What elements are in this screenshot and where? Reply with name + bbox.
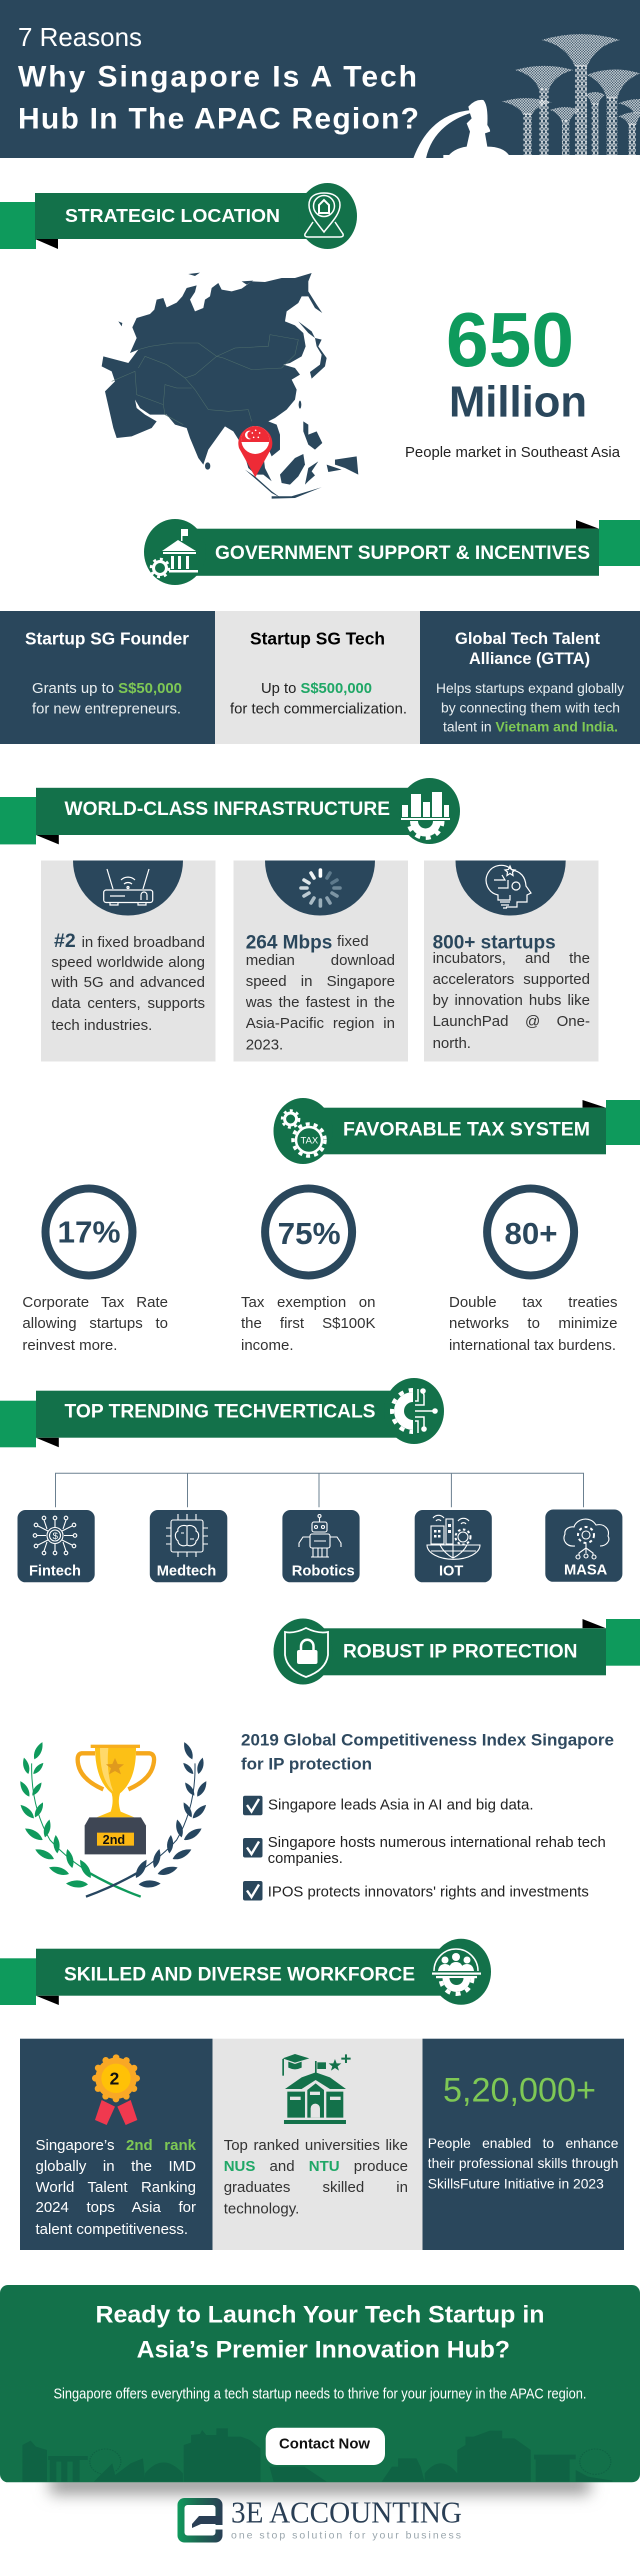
- icon: smart city globe: [427, 1515, 480, 1559]
- icon: robot: [299, 1514, 341, 1557]
- icon: bulb and head: [456, 860, 566, 916]
- tile: MASA: MASA: [564, 1562, 607, 1579]
- panel: SkillsFuture: [422, 2039, 624, 2250]
- heading text: STRATEGIC LOCATION: [65, 205, 280, 226]
- icon: university with graduation cap: [282, 2054, 351, 2124]
- text: talent ranking: globally in the IMD: [36, 2158, 196, 2174]
- checklist item 2: [243, 1834, 606, 1867]
- icon: brain chip: [166, 1514, 208, 1557]
- panel: global tech talent alliance: Helps startups expand globally: [436, 680, 624, 696]
- heading text: GOVERNMENT SUPPORT & INCENTIVES: [215, 543, 590, 564]
- heading text: TOP TRENDING TECHVERTICALS: [64, 1401, 376, 1423]
- text: 264 Mbps: Asia-Pacific region in: [246, 1015, 395, 1032]
- stat: 17 percent corporate tax: 17%: [58, 1215, 120, 1250]
- skyline silhouette: [22, 2428, 612, 2482]
- text: 264 Mbps: [246, 932, 395, 1054]
- text: talent ranking: [36, 2136, 196, 2238]
- country borders: [112, 335, 298, 425]
- mainland Asia: [102, 273, 322, 481]
- section heading: government support: [144, 519, 640, 585]
- stat: 80 plus treaties: [449, 1188, 618, 1354]
- text: number 2 in broadband: with 5G and advanced: [51, 974, 205, 991]
- text: 264 Mbps: speed in Singapore: [246, 973, 395, 990]
- text: universities: NUS and NTU produce: [224, 2158, 408, 2174]
- section heading: strategic location: [0, 183, 357, 249]
- stat: 17 percent corporate tax: allowing startups to: [22, 1315, 168, 1332]
- tagline: one stop solution for your business: [231, 2529, 461, 2541]
- text: talent ranking: World Talent Ranking: [36, 2178, 196, 2196]
- heading: for IP protection: [241, 1754, 372, 1773]
- panel: startup SG tech: [215, 611, 420, 744]
- text: talent ranking: talent competitiveness.: [36, 2221, 188, 2238]
- text: number 2 in broadband: [51, 930, 205, 1034]
- icon: Singapore flag pin: [238, 426, 272, 477]
- text: 800+ startups: accelerators supported: [433, 971, 590, 988]
- text: number 2 in broadband: data centers, supports: [51, 995, 205, 1012]
- panel: startup SG tech: Startup SG Tech: [250, 629, 385, 649]
- text block: IP protection index: [241, 1731, 614, 1900]
- stat: 80 plus treaties: 80+: [504, 1216, 558, 1251]
- contact button: [266, 2428, 385, 2465]
- panel: global tech talent alliance: Global Tech Talent: [455, 629, 600, 648]
- panel: startup SG founder: [0, 611, 215, 744]
- stat: 75 percent tax exemption: 75%: [278, 1216, 341, 1251]
- text: number 2 in broadband: #2: [54, 930, 76, 952]
- checklist item 2: companies.: [268, 1850, 343, 1867]
- checklist item 2: Singapore hosts numerous international rehab tech: [268, 1834, 606, 1851]
- text: 264 Mbps: 264 Mbps: [246, 932, 332, 954]
- panel: startup SG tech: for tech commercialization.: [230, 700, 407, 718]
- stat: 650 million: Million: [449, 378, 587, 427]
- icon: government building with gear: [151, 529, 198, 577]
- text: number 2 in broadband: in fixed broadband: [82, 934, 205, 951]
- panel: card broadband: [41, 860, 216, 1062]
- tile: IOT: [415, 1510, 492, 1582]
- panel: global tech talent alliance: [420, 611, 640, 744]
- CTA heading: Asia’s Premier Innovation Hub?: [137, 2336, 510, 2363]
- icon: loading spinner: [265, 860, 375, 916]
- heading text: SKILLED AND DIVERSE WORKFORCE: [64, 1965, 415, 1986]
- icon: medal: [95, 2058, 137, 2125]
- stat: 17 percent corporate tax: [22, 1188, 168, 1354]
- tile: Fintech: [18, 1510, 95, 1582]
- stat: 650 million: 650: [446, 298, 574, 384]
- map of Asia with Singapore pin: [102, 273, 358, 499]
- text: number 2 in broadband: tech industries.: [51, 1017, 152, 1034]
- stat: 75 percent tax exemption: Tax exemption on: [241, 1294, 376, 1311]
- connector tree: [56, 1473, 584, 1507]
- stat: 75 percent tax exemption: [241, 1188, 376, 1354]
- panel: talent ranking: [20, 2039, 212, 2250]
- CTA heading: [96, 2301, 544, 2363]
- text: universities: graduates skilled in: [224, 2178, 408, 2196]
- header banner: [0, 0, 640, 159]
- text: number 2 in broadband: speed worldwide along: [51, 954, 205, 970]
- icon: navy laurel branch: [86, 1741, 209, 1897]
- panel: startup SG founder: for new entrepreneurs.: [32, 700, 181, 718]
- panel: global tech talent alliance: Alliance (GTTA): [469, 649, 590, 668]
- tile: Robotics: [282, 1510, 360, 1582]
- stat: 17 percent corporate tax: reinvest more.: [22, 1337, 117, 1354]
- tile: Robotics: Robotics: [292, 1563, 355, 1580]
- text: 800+ startups: LaunchPad @ One-: [433, 1013, 590, 1030]
- text: 264 Mbps: was the fastest in the: [246, 994, 395, 1011]
- contact button: Contact Now: [279, 2436, 370, 2453]
- header text: 7 Reasons: 7 Reasons: [18, 22, 142, 52]
- icon: cloud gear: [564, 1519, 609, 1559]
- text: 800+ startups: north.: [433, 1035, 471, 1052]
- checklist item 3: IPOS protects innovators' rights and investments: [268, 1883, 589, 1900]
- stat: 80 plus treaties: Double tax treaties: [449, 1294, 618, 1311]
- text: 264 Mbps: median download: [246, 952, 395, 969]
- icon: supertrees and merlion skyline: [413, 34, 640, 159]
- stat: 650 million: [405, 298, 621, 461]
- icon: team and gear: [432, 1949, 481, 1994]
- text: talent ranking: 2024 tops Asia for: [36, 2199, 196, 2216]
- section heading: robust IP protection: [274, 1618, 640, 1684]
- call to action panel: [0, 2285, 640, 2494]
- section heading: skilled and diverse workforce: [0, 1939, 491, 2005]
- CTA heading: Ready to Launch Your Tech Startup in: [96, 2301, 544, 2328]
- icon: gold trophy: [78, 1745, 154, 1854]
- text: 800+ startups: by innovation hubs like: [433, 992, 590, 1009]
- heading text: FAVORABLE TAX SYSTEM: [343, 1120, 590, 1141]
- logo: 3E Accounting: [178, 2495, 462, 2542]
- icon: router: [73, 860, 183, 916]
- icon: city and gear: [401, 792, 450, 838]
- icon: coin circuit: $: [53, 1531, 59, 1542]
- text: SkillsFuture: SkillsFuture Initiative in 2023: [428, 2175, 604, 2191]
- icon: tax gears: TAX: [300, 1136, 319, 1146]
- tile: MASA: [545, 1510, 622, 1582]
- title: [18, 61, 419, 136]
- icon: gold trophy: 2nd: [103, 1833, 125, 1847]
- panel: universities: [212, 2039, 422, 2250]
- title: Why Singapore Is A Tech: [18, 61, 417, 94]
- heading text: ROBUST IP PROTECTION: [343, 1641, 578, 1662]
- icon: medal: 2: [110, 2068, 119, 2088]
- icon: green laurel branch: [18, 1741, 141, 1897]
- panel: startup SG founder: Startup SG Founder: [25, 629, 189, 649]
- text: 800+ startups: incubators, and the: [433, 950, 590, 967]
- checklist item 1: Singapore leads Asia in AI and big data.: [268, 1796, 534, 1813]
- tile: Medtech: Medtech: [157, 1563, 216, 1580]
- panel: startup SG tech: Up to S$500,000: [261, 680, 372, 697]
- panel: startup SG founder: Grants up to S$50,000: [32, 680, 182, 697]
- text: talent ranking: Singapore’s 2nd rank: [36, 2136, 196, 2154]
- icon: trophy with laurel wreath: [18, 1741, 209, 1897]
- icon: logo mark: [178, 2498, 223, 2542]
- panel: card download speed: [234, 860, 408, 1062]
- text: 264 Mbps: 2023.: [246, 1037, 283, 1054]
- wordmark: 3E ACCOUNTING: [231, 2495, 462, 2530]
- heading: [241, 1731, 614, 1773]
- text: 800+ startups: 800+ startups: [433, 932, 556, 954]
- section heading: favorable tax system: [274, 1098, 640, 1164]
- stat: 75 percent tax exemption: the first S$100K: [241, 1315, 376, 1332]
- panel: global tech talent alliance: by connecting them with tech: [441, 699, 620, 715]
- icon: location pin: [305, 193, 343, 237]
- section heading: top trending techverticals: [0, 1378, 444, 1447]
- icon: shield with lock: [285, 1628, 328, 1677]
- stat: 75 percent tax exemption: income.: [241, 1337, 294, 1354]
- tile: Medtech: [150, 1510, 227, 1582]
- stat: 5,20,000+: 5,20,000+: [443, 2072, 596, 2110]
- heading text: WORLD-CLASS INFRASTRUCTURE: [64, 799, 390, 820]
- stat: 650 million: People market in Southeast Asia: [405, 444, 621, 461]
- tile: IOT: IOT: [439, 1563, 463, 1580]
- section heading: world-class infrastructure: [0, 778, 460, 844]
- tile: Fintech: Fintech: [29, 1563, 81, 1580]
- text: 264 Mbps: fixed: [337, 933, 369, 950]
- icon: gear circuit: [392, 1388, 438, 1433]
- panel: card startups: [424, 860, 598, 1062]
- text: SkillsFuture: their professional skills through: [428, 2156, 618, 2171]
- heading: 2019 Global Competitiveness Index Singapore: [241, 1731, 614, 1750]
- stat: 80 plus treaties: networks to minimize: [449, 1315, 618, 1332]
- islands: [118, 273, 358, 499]
- title: Hub In The APAC Region?: [18, 103, 419, 136]
- panel: global tech talent alliance: talent in Vietnam and India.: [443, 718, 618, 734]
- text: SkillsFuture: People enabled to enhance: [428, 2136, 618, 2151]
- icon: tax gears: [282, 1110, 325, 1156]
- text: universities: [224, 2136, 408, 2217]
- stat: 80 plus treaties: international tax burdens.: [449, 1337, 616, 1354]
- text: universities: technology.: [224, 2200, 299, 2217]
- stat: 17 percent corporate tax: Corporate Tax Rate: [22, 1294, 168, 1311]
- text: universities: Top ranked universities like: [224, 2136, 408, 2154]
- text: 800+ startups: [433, 932, 590, 1052]
- text: SkillsFuture: [428, 2135, 618, 2191]
